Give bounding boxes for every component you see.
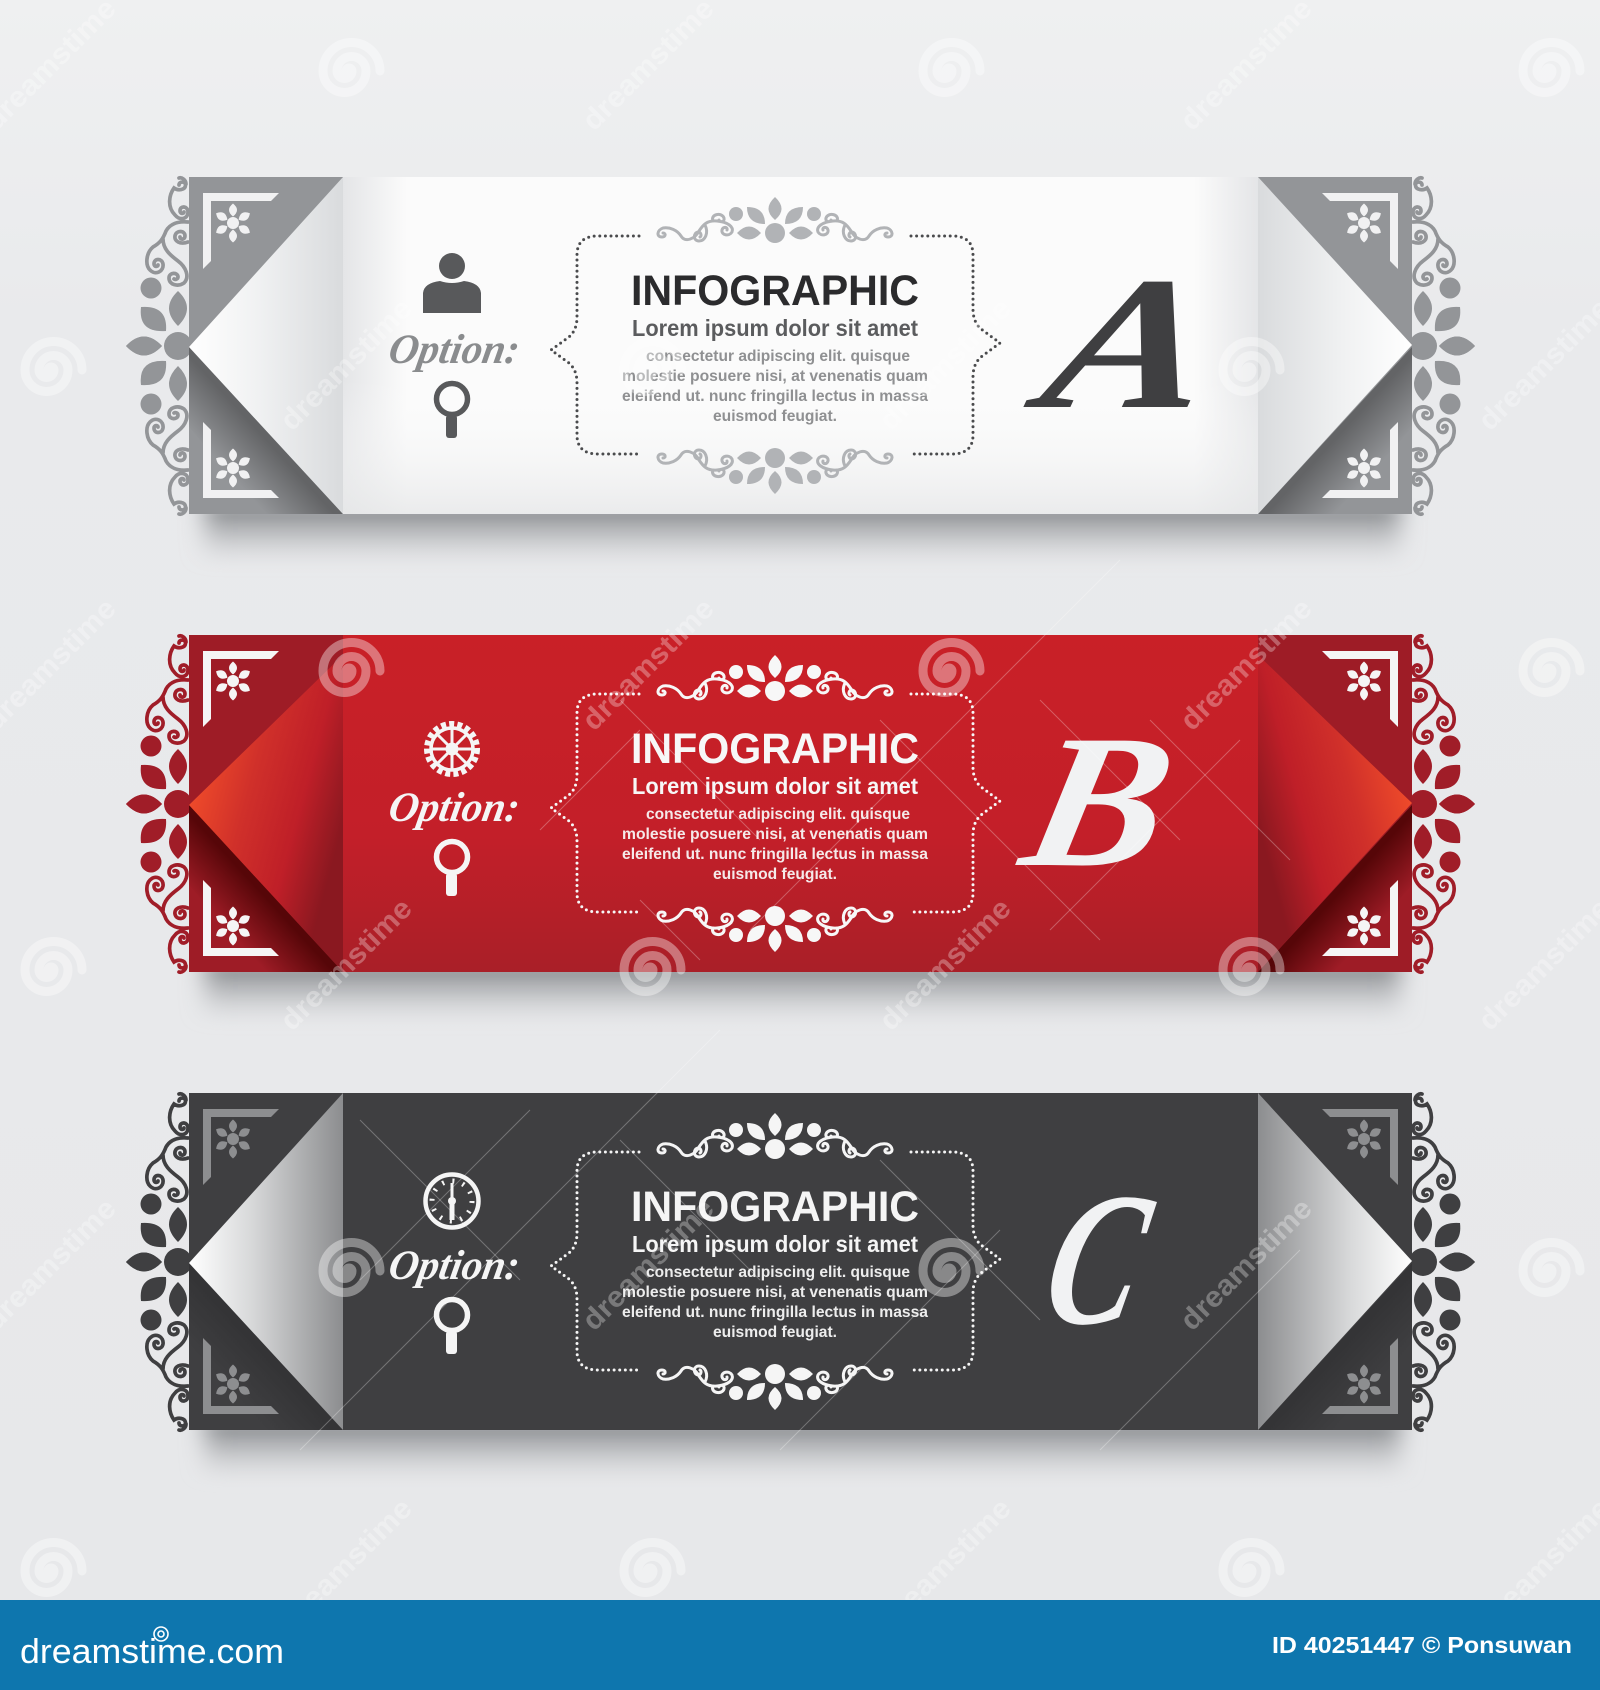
watermark lines [300, 560, 1300, 1450]
corner brackets and flowers [203, 193, 1398, 498]
body text: molestie posuere nisi, at venenatis quam [622, 826, 928, 843]
body text: euismod feugiat. [713, 866, 837, 883]
body text: euismod feugiat. [713, 1324, 837, 1341]
right paper fold [1258, 655, 1412, 972]
right corner plate [1256, 635, 1412, 972]
left paper fold [189, 1093, 343, 1430]
ornament: bottom [658, 906, 892, 952]
footer credit: ID 40251447 © Ponsuwan [1272, 1632, 1572, 1658]
ornament: right lace edge [1409, 636, 1475, 972]
left corner plate [189, 635, 345, 972]
fold shadow right [1258, 347, 1412, 514]
body text: eleifend ut. nunc fringilla lectus in massa [622, 846, 928, 863]
panel: banner C [126, 1093, 1475, 1430]
ornament: top [658, 655, 892, 701]
right corner plate [1256, 177, 1412, 514]
heading: INFOGRAPHIC [631, 267, 919, 315]
dotted frame [551, 236, 1000, 454]
icon: magnifier [436, 384, 468, 438]
right paper fold [1258, 177, 1412, 514]
fold shadow left [189, 347, 343, 514]
banner shadows [205, 508, 1400, 1486]
dotted frame [551, 1152, 1000, 1370]
ornament: left lace edge [126, 1094, 192, 1430]
ornament: right lace edge [1409, 1094, 1475, 1430]
left corner plate [189, 177, 345, 514]
left paper fold [189, 177, 343, 514]
ornament: left lace edge [126, 178, 192, 514]
icon: person [423, 253, 481, 313]
ornament: bottom [658, 448, 892, 494]
subheading: Lorem ipsum dolor sit amet [632, 773, 918, 799]
body text [622, 348, 928, 425]
ornament: right lace edge [1409, 178, 1475, 514]
letter C: C [1029, 1154, 1167, 1365]
icon: clock [426, 1174, 478, 1228]
subheading: Lorem ipsum dolor sit amet [632, 315, 918, 341]
red paper band [343, 635, 1258, 972]
option label: Option: [385, 326, 523, 373]
subheading: Lorem ipsum dolor sit amet [632, 1231, 918, 1257]
dark paper band [343, 1093, 1258, 1430]
body text: eleifend ut. nunc fringilla lectus in massa [622, 1304, 928, 1321]
body text: consectetur adipiscing elit. quisque [646, 348, 910, 365]
letter A: A [1014, 238, 1235, 449]
ornament: top [658, 1113, 892, 1159]
letter B: B [1006, 696, 1191, 907]
fold shadow right [1258, 1263, 1412, 1430]
corner brackets and flowers [203, 651, 1398, 956]
ornament: left lace edge [126, 636, 192, 972]
fold shadow left [189, 805, 343, 972]
dotted frame [551, 694, 1000, 912]
body text: eleifend ut. nunc fringilla lectus in massa [622, 388, 928, 405]
icon: magnifier [436, 1300, 468, 1354]
fold shadow right [1258, 805, 1412, 972]
icon: logo spiral [154, 1627, 168, 1641]
body text [622, 806, 928, 883]
body text: molestie posuere nisi, at venenatis quam [622, 368, 928, 385]
right corner plate [1256, 1093, 1412, 1430]
footer bar [0, 1600, 1600, 1690]
corner brackets and flowers [203, 1109, 1398, 1414]
ornament: top [658, 197, 892, 243]
left corner plate [189, 1093, 345, 1430]
heading: INFOGRAPHIC [631, 725, 919, 773]
body text: consectetur adipiscing elit. quisque [646, 1264, 910, 1281]
icon: magnifier [436, 842, 468, 896]
white paper band [343, 177, 1258, 514]
body text: consectetur adipiscing elit. quisque [646, 806, 910, 823]
panel: banner B [126, 635, 1475, 972]
heading: INFOGRAPHIC [631, 1183, 919, 1231]
panel: banner A [126, 177, 1475, 514]
option label: Option: [385, 1242, 523, 1289]
body text: euismod feugiat. [713, 408, 837, 425]
left paper fold [189, 655, 343, 972]
body text [622, 1264, 928, 1341]
body text: molestie posuere nisi, at venenatis quam [622, 1284, 928, 1301]
footer logo: dreamstime.com [20, 1633, 284, 1671]
fold shadow left [189, 1263, 343, 1430]
ornament: bottom [658, 1364, 892, 1410]
right paper fold [1258, 1093, 1412, 1430]
icon: gear [427, 724, 477, 774]
option label: Option: [385, 784, 523, 831]
